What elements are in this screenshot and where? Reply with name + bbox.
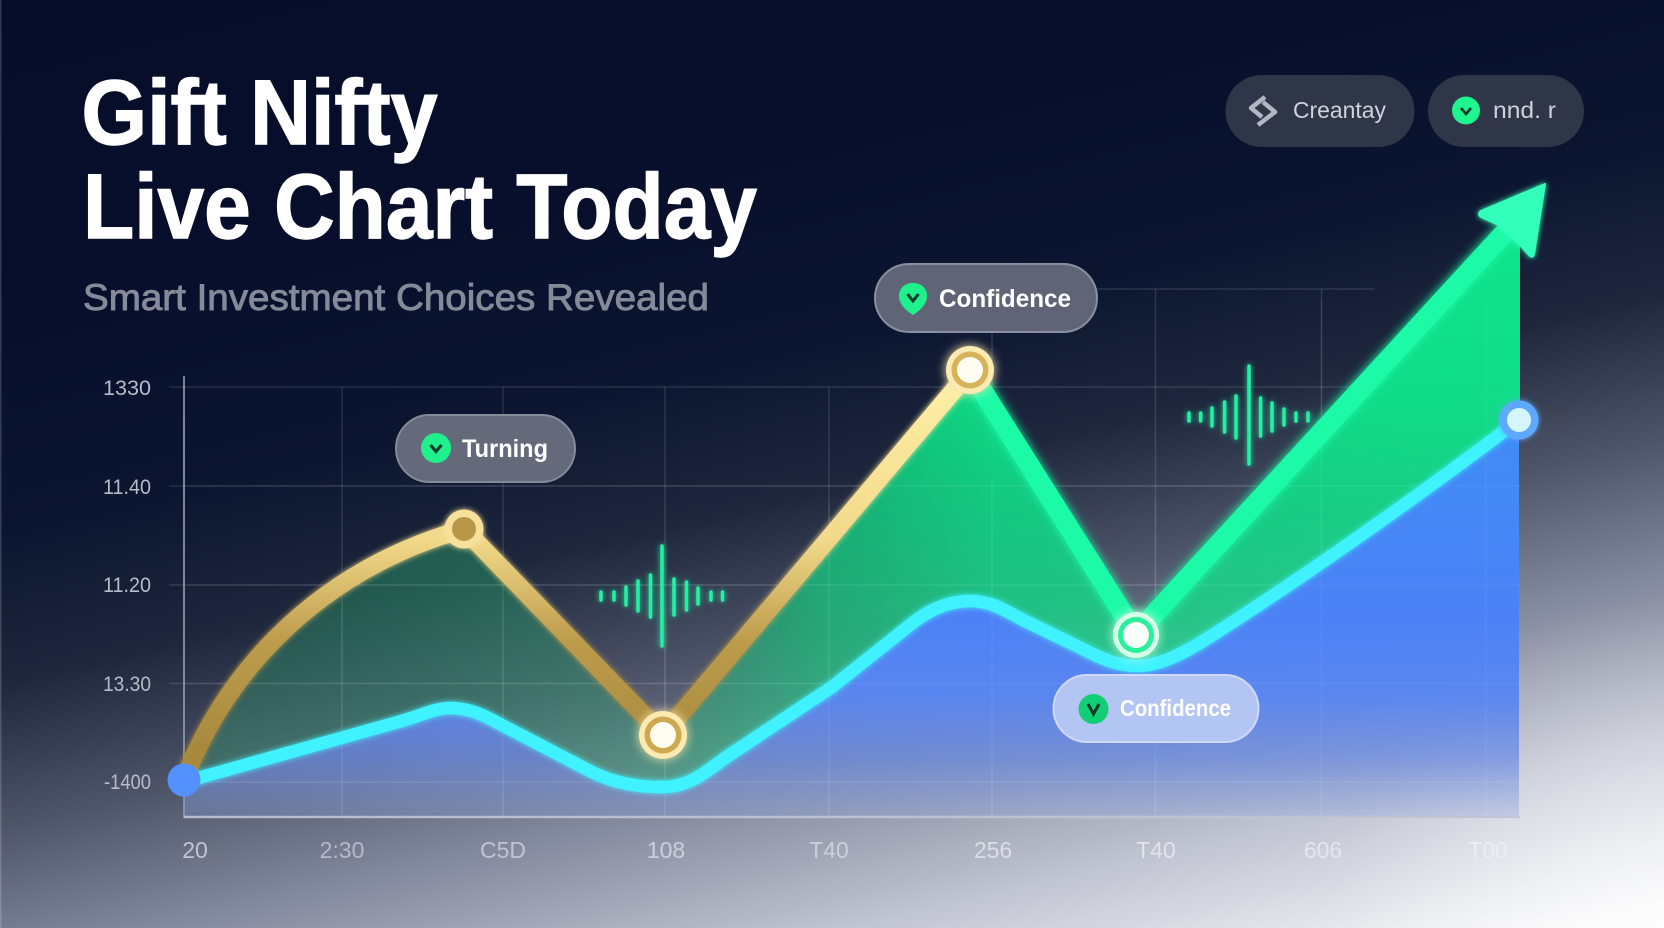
x axis labels: 2:30 xyxy=(320,837,364,863)
waveform icon: right xyxy=(1189,366,1308,464)
icon: green check xyxy=(421,433,451,463)
baseline xyxy=(184,816,1520,818)
x axis labels: C5D xyxy=(480,837,526,863)
callout label: Confidence xyxy=(1120,695,1231,721)
title xyxy=(82,62,757,258)
title: Live Chart Today xyxy=(83,156,757,258)
callout label: Turning xyxy=(462,435,548,463)
x axis labels: 108 xyxy=(647,837,685,863)
y axis labels: 11.20 xyxy=(103,574,151,597)
chart axes xyxy=(184,376,1520,817)
y axis labels: 11.40 xyxy=(103,476,151,499)
x axis labels: 20 xyxy=(182,837,208,863)
y axis labels: 1330 xyxy=(103,377,151,400)
icon: green shield xyxy=(899,283,927,315)
green price line xyxy=(970,231,1506,634)
callout: Turning xyxy=(396,415,575,482)
x axis labels: 606 xyxy=(1304,837,1342,863)
y axis labels: -1400 xyxy=(104,771,151,794)
green arrow head xyxy=(1479,184,1545,257)
y axis labels xyxy=(103,377,151,794)
icon: green check xyxy=(1078,694,1108,724)
title: Gift Nifty xyxy=(82,62,438,164)
gold node: first peak xyxy=(444,510,484,548)
chart grid xyxy=(169,289,1520,816)
waveform icon: left xyxy=(601,546,722,646)
area: blue fill under cyan line xyxy=(184,420,1521,816)
pill label: nnd. r xyxy=(1493,97,1556,123)
gold price line xyxy=(184,371,970,780)
icon: green check xyxy=(1452,96,1480,124)
subtitle: Smart Investment Choices Revealed xyxy=(83,277,709,318)
cyan line xyxy=(184,420,1519,787)
x axis labels: 256 xyxy=(974,837,1012,863)
start point xyxy=(168,764,200,796)
callout label: Confidence xyxy=(939,285,1071,313)
green node xyxy=(1113,612,1159,658)
callout: Confidence bottom xyxy=(1054,675,1258,742)
x axis labels: T40 xyxy=(1136,837,1176,863)
pill: status xyxy=(1428,75,1584,147)
grid overlay on areas xyxy=(184,300,1520,816)
icon: bolt xyxy=(1251,97,1275,125)
gold node: valley xyxy=(639,711,687,759)
pill: Creantay xyxy=(1226,75,1414,147)
x axis labels xyxy=(182,837,1508,863)
pill label: Creantay xyxy=(1293,97,1386,123)
gold node: high peak xyxy=(946,346,994,394)
area: green fill between price line and cyan line xyxy=(184,231,1520,787)
blue end node xyxy=(1500,400,1538,440)
x axis labels: T00 xyxy=(1468,837,1508,863)
callout: Confidence top xyxy=(875,264,1097,332)
x axis labels: T40 xyxy=(809,837,849,863)
y axis labels: 13.30 xyxy=(103,673,151,696)
